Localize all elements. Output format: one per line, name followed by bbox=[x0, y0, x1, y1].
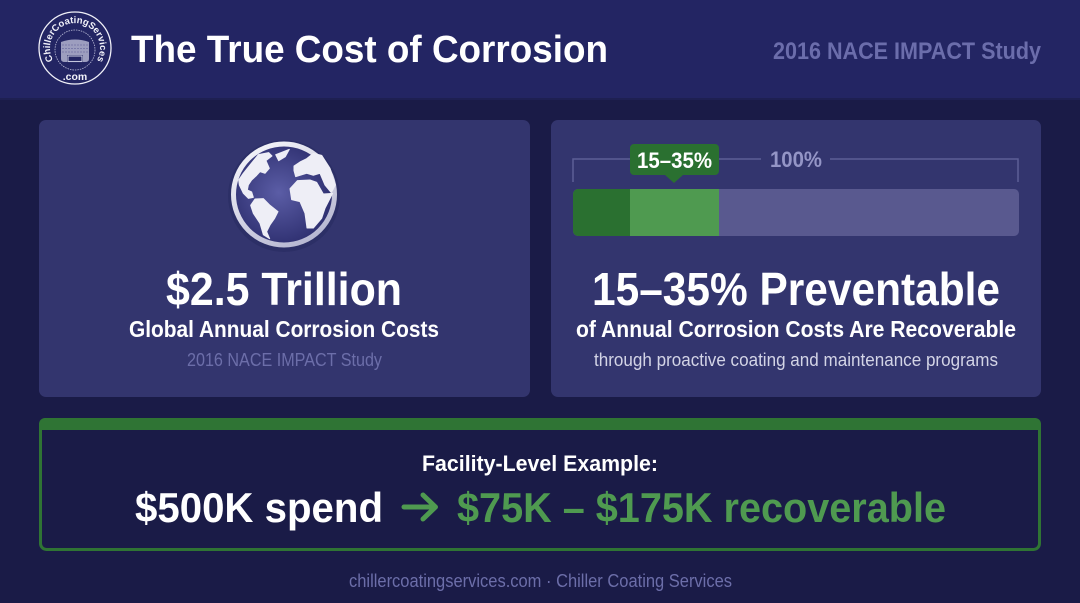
recoverable figure: $75K – $175K recoverable bbox=[457, 484, 946, 531]
callout: 15–35% bbox=[630, 144, 719, 183]
logo: .com bbox=[63, 71, 87, 83]
title: The True Cost of Corrosion bbox=[131, 29, 608, 71]
panel: preventable share bbox=[551, 120, 1041, 397]
subheading: Global Annual Corrosion Costs bbox=[129, 316, 439, 342]
big figure: $2.5 Trillion bbox=[166, 263, 402, 315]
footer: chillercoatingservices.com · Chiller Coating Services bbox=[349, 571, 732, 591]
panel: facility-level example bbox=[39, 418, 1041, 550]
big figure: 15–35% Preventable bbox=[592, 263, 1000, 315]
supporting text: through proactive coating and maintenance programs bbox=[594, 350, 998, 370]
source note: 2016 NACE IMPACT Study bbox=[187, 350, 382, 370]
panel: global costs bbox=[39, 120, 530, 397]
spend figure: $500K spend bbox=[135, 484, 383, 531]
100% label: 100% bbox=[770, 147, 822, 172]
subheading: of Annual Corrosion Costs Are Recoverable bbox=[576, 316, 1016, 342]
callout: 15–35%: 15–35% bbox=[637, 148, 712, 173]
example heading: Facility-Level Example: bbox=[422, 451, 658, 476]
arrow bbox=[404, 495, 436, 519]
logo bbox=[38, 11, 112, 85]
icon: globe bbox=[228, 140, 340, 252]
header band bbox=[0, 0, 1080, 100]
source label: 2016 NACE IMPACT Study bbox=[773, 38, 1042, 65]
bracket scale bbox=[573, 159, 1018, 182]
progress bar bbox=[573, 189, 1019, 236]
logo: ChillerCoatingServices bbox=[43, 16, 106, 62]
